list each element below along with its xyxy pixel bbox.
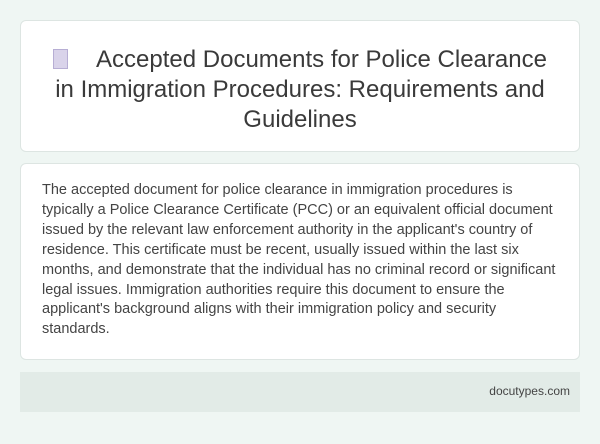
text block: months, and demonstrate that the individual has no criminal record or significant <box>42 262 555 278</box>
panel: title <box>20 20 580 152</box>
text block: issued by the relevant law enforcement authority in the applicant's country of <box>42 222 532 238</box>
text block: The accepted document for police clearance in immigration procedures is <box>42 182 513 198</box>
text block <box>42 182 556 337</box>
text block: legal issues. Immigration authorities require this document to ensure the <box>42 282 505 298</box>
text block: typically a Police Clearance Certificate (PCC) or an equivalent official document <box>42 202 553 218</box>
text block: residence. This certificate must be recent, usually issued within the last six <box>42 242 519 258</box>
text block: standards. <box>42 321 110 337</box>
title: Accepted Documents for Police Clearance in Immigration Procedures: Requirements and Guidelines <box>55 46 547 133</box>
icon: document <box>53 49 68 69</box>
footer: docutypes.com <box>489 384 570 398</box>
panel: description <box>20 163 580 360</box>
text block: applicant's background aligns with their immigration policy and security <box>42 301 496 317</box>
footer <box>20 372 580 412</box>
